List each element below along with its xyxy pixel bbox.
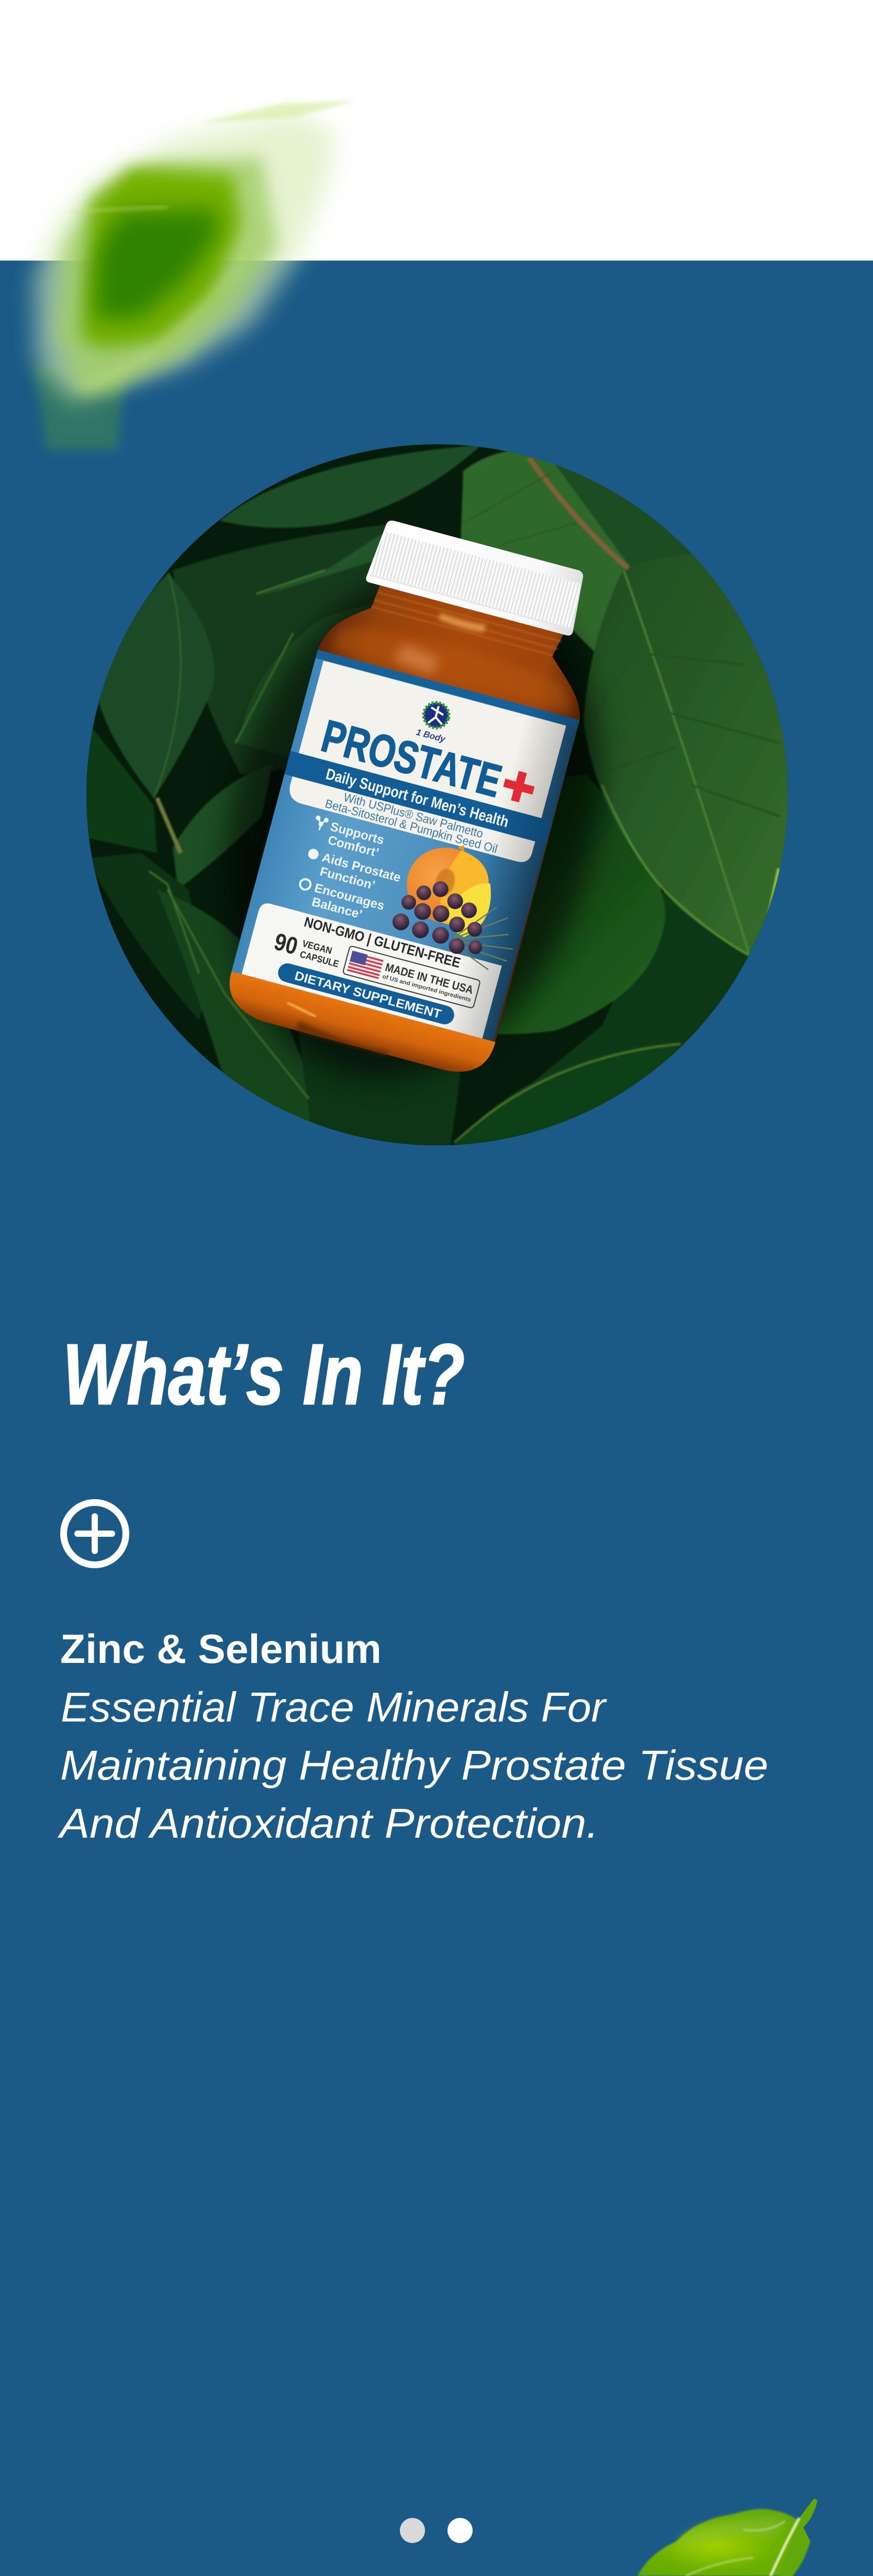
product name: PROSTATE xyxy=(317,711,507,807)
leaf: upper left dark leaf xyxy=(220,445,482,528)
leaf: lower right back leaf xyxy=(455,890,754,1151)
leaf: upper centre leaf xyxy=(461,449,649,675)
carousel dots xyxy=(400,2518,473,2543)
leaf: upper right leaf xyxy=(552,460,696,568)
leaf: lower left dark leaf xyxy=(86,853,209,1020)
leaf veins xyxy=(149,458,780,1143)
leaf: left leaf xyxy=(97,573,215,798)
ingredients text: Beta-Sitosterol & Pumpkin Seed Oil xyxy=(323,796,499,856)
tagline band text: Daily Support for Men’s Health xyxy=(324,766,510,831)
ingredient heading: Zinc & Selenium xyxy=(60,1626,382,1672)
capsule count: 90 xyxy=(272,928,301,960)
benefit list: Balance’ xyxy=(310,895,364,922)
ingredients text: With USPlus® Saw Palmetto xyxy=(342,790,485,840)
made in the USA badge: MADE IN THE USA xyxy=(384,961,475,997)
product label xyxy=(231,650,579,1041)
leaf: bottom middle dark leaf xyxy=(293,994,461,1151)
green leaf, bottom right xyxy=(637,2499,818,2576)
icon: plus in circle xyxy=(64,1503,126,1565)
leaf: centre lighter leaf xyxy=(239,604,373,753)
circular leaf photo xyxy=(84,444,801,1156)
made in the USA badge xyxy=(343,946,480,1008)
pumpkin illustration xyxy=(396,833,503,941)
leaf: small bright fold xyxy=(256,534,382,597)
bottle drop shadow xyxy=(171,522,656,1121)
dietary supplement pill: DIETARY SUPPLEMENT xyxy=(293,969,443,1021)
brand logo: 1 Body xyxy=(415,727,447,745)
capsule count: VEGAN xyxy=(301,938,333,956)
berries illustration xyxy=(388,872,496,960)
leaf: mid left leaf xyxy=(173,764,272,890)
leaf: bottom leaf xyxy=(450,1041,680,1156)
dietary supplement pill xyxy=(276,961,456,1027)
benefit list: Supports xyxy=(329,819,386,848)
red plus xyxy=(500,768,538,805)
benefit list: Encourages xyxy=(313,881,386,913)
leaf: large right leaf xyxy=(584,555,801,955)
amber glass body xyxy=(221,573,602,1083)
ingredient description xyxy=(58,1684,768,1847)
benefit list: Aids Prostate xyxy=(320,850,402,885)
benefit list xyxy=(293,815,411,929)
leaf: far left lower leaf xyxy=(84,717,157,853)
ingredient description: Maintaining Healthy Prostate Tissue xyxy=(60,1742,768,1788)
lower label claims: NON-GMO | GLUTEN-FREE xyxy=(303,914,462,971)
leaf: lower right round leaf xyxy=(429,774,665,1034)
supplement bottle xyxy=(221,510,619,1083)
saw palmetto fronds xyxy=(448,898,522,974)
ingredient description: Essential Trace Minerals For xyxy=(61,1684,607,1730)
blurred green leaf, top left xyxy=(32,100,356,450)
title: What’s In It? xyxy=(63,1326,465,1422)
capsule count xyxy=(272,928,344,971)
brand logo xyxy=(415,699,455,745)
capsule count: CAPSULE xyxy=(299,949,340,969)
leaf: centre left large leaf xyxy=(173,523,398,774)
white ribbed cap xyxy=(365,518,589,637)
made in the USA badge: of US and imported ingredients xyxy=(382,973,472,1003)
ingredient description: And Antioxidant Protection. xyxy=(58,1800,599,1847)
leaf: lower left leaf xyxy=(157,890,314,1146)
benefit list: Comfort’ xyxy=(326,833,380,860)
benefit list: Function’ xyxy=(318,864,376,893)
